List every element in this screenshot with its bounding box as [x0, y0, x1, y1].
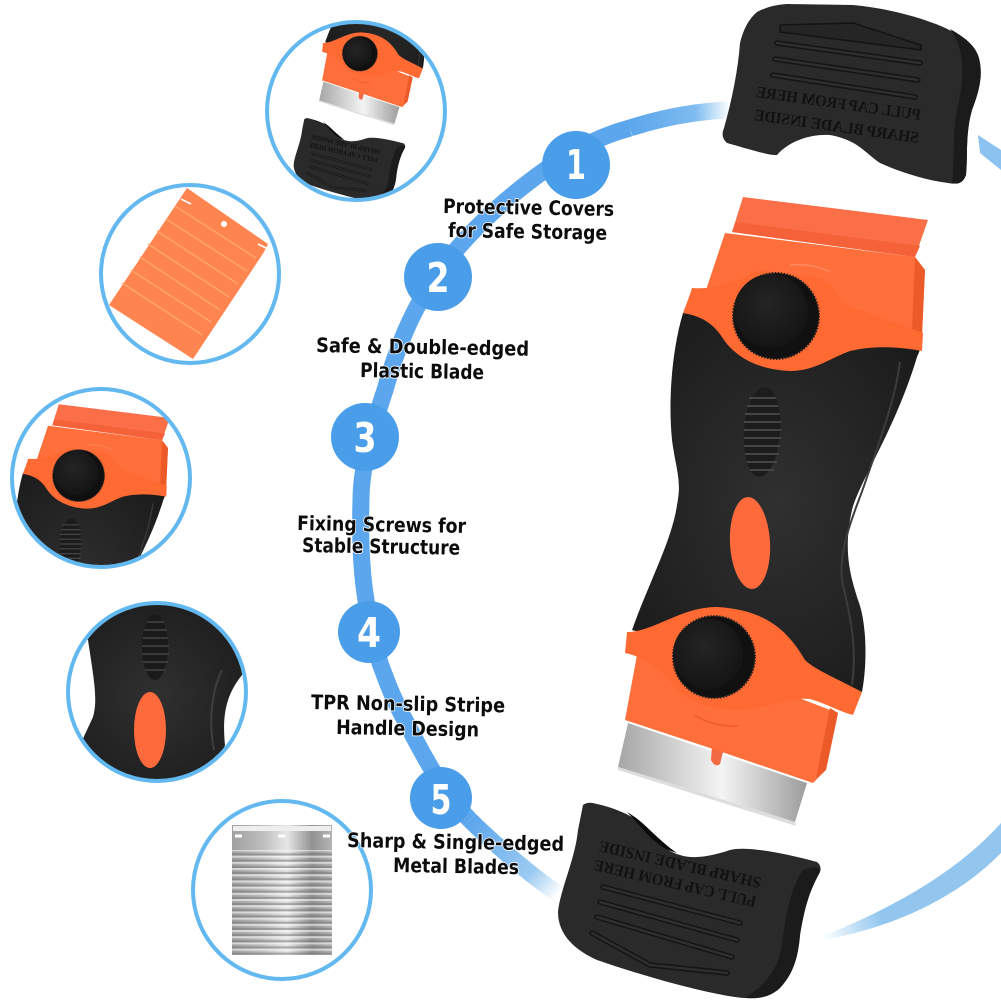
step 4 label: [311, 690, 505, 741]
step 5 badge: 5: [430, 776, 452, 824]
step 4 badge: [338, 601, 400, 663]
top protective cap: SHARP BLADE INSIDE: [753, 107, 920, 147]
bottom protective cap: [558, 803, 821, 998]
detail circle: fixing screw: [10, 387, 192, 569]
step 1 label: [443, 194, 614, 245]
step 2 badge: 2: [426, 254, 450, 302]
step 2 label: Safe & Double-edged: [316, 333, 529, 361]
detail circle: metal blades: [193, 801, 371, 979]
step 3 label: Stable Structure: [302, 533, 460, 560]
blue arc: left curve linking numbered steps: [361, 110, 728, 893]
step 5 badge: [410, 767, 472, 829]
plastic blade shape: [109, 188, 268, 359]
step 3 label: [297, 511, 466, 560]
detail circle: protective cover: [265, 20, 447, 202]
step 5 label: Sharp & Single-edged: [347, 828, 564, 856]
top protective cap: PULL CAP FROM HERE: [755, 84, 922, 124]
step 3 badge: [331, 403, 399, 471]
step 1 badge: [542, 131, 610, 199]
blue arc: upper right segment: [978, 135, 1001, 170]
main product: razor scraper: [618, 197, 928, 826]
step 3 badge: 3: [354, 414, 376, 462]
step 3 label: Fixing Screws for: [297, 511, 466, 538]
blue arc: lower right segment: [823, 823, 1001, 940]
detail circle: plastic blade: [101, 185, 279, 363]
step 4 badge: 4: [357, 609, 381, 657]
step 5 label: [347, 828, 564, 879]
detail circle: TPR handle: [60, 600, 250, 790]
top protective cap: [723, 4, 981, 184]
step 4 label: Handle Design: [336, 715, 479, 741]
step 5 label: Metal Blades: [393, 853, 519, 879]
step 2 badge: [404, 243, 472, 311]
step 4 label: TPR Non-slip Stripe: [311, 690, 505, 717]
step 1 label: for Safe Storage: [448, 218, 607, 245]
step 2 label: Plastic Blade: [360, 358, 484, 384]
step 1 label: Protective Covers: [443, 194, 614, 221]
step 1 badge: 1: [566, 141, 586, 189]
step 2 label: [316, 333, 529, 384]
